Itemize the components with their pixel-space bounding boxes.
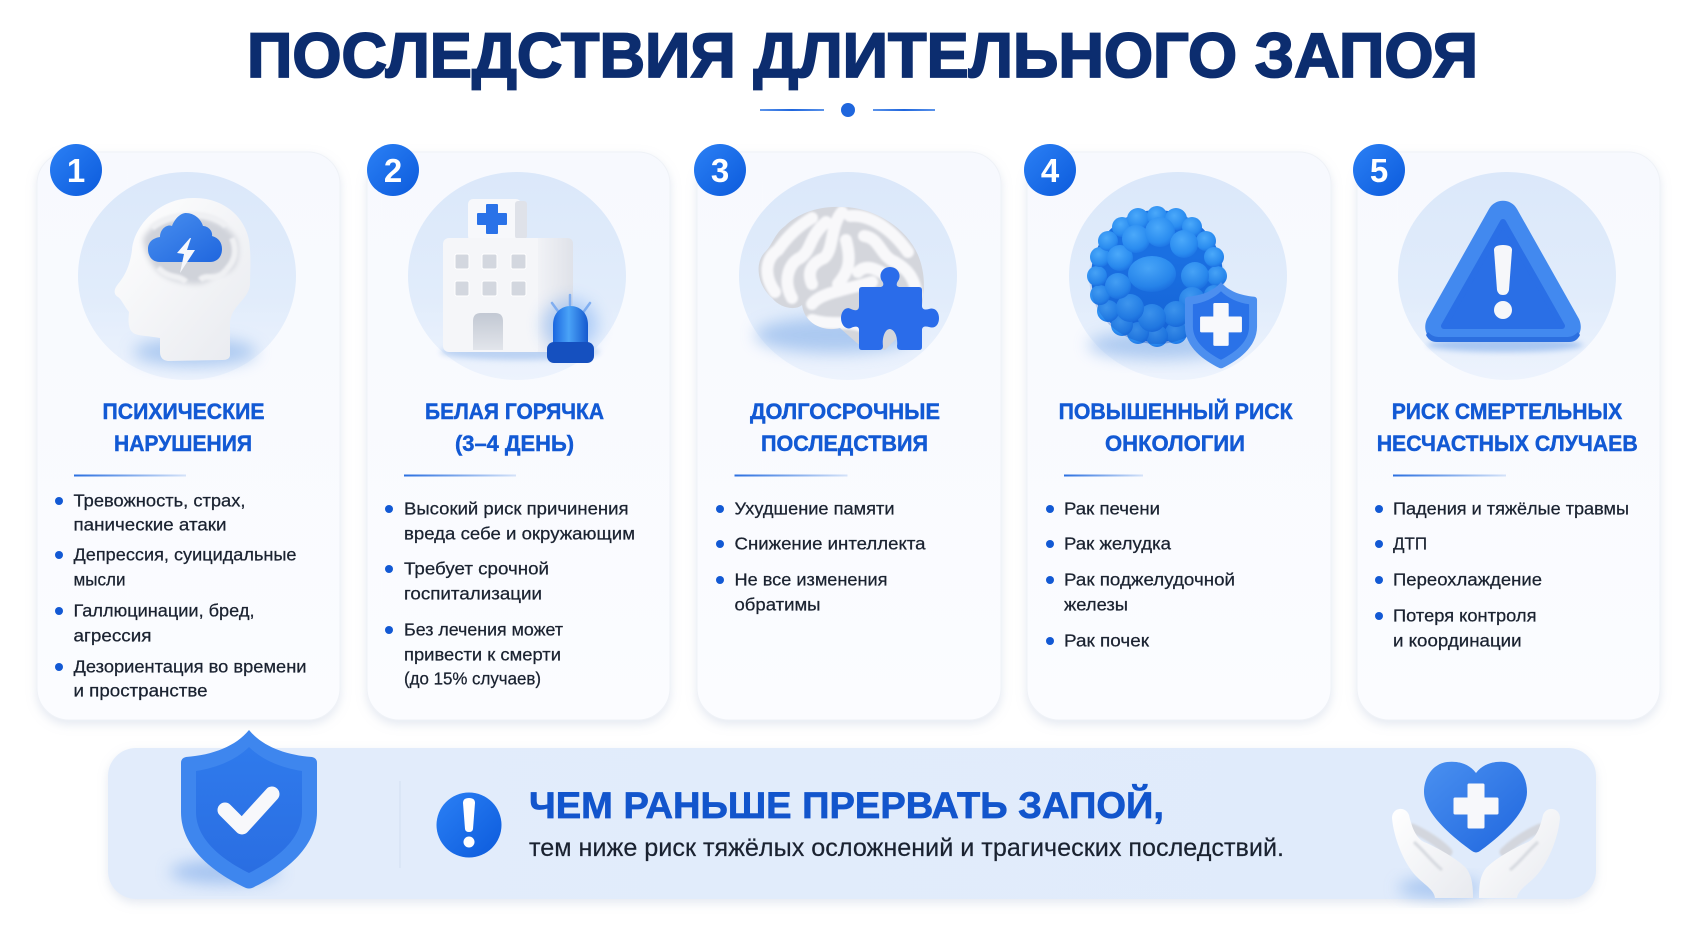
icon: shield with check xyxy=(170,730,317,888)
bullet list: вреда себе и окружающим xyxy=(404,523,635,543)
bullet list: Рак поджелудочной xyxy=(1064,569,1235,589)
panel: psychic disorders xyxy=(37,144,340,720)
heading xyxy=(102,399,264,456)
icon: head with storm cloud xyxy=(115,198,257,366)
bullet list: Снижение интеллекта xyxy=(734,533,926,553)
bullet list: Депрессия, суицидальные xyxy=(74,544,296,564)
bullet list: Ухудшение памяти xyxy=(734,498,894,518)
heading xyxy=(425,399,604,456)
banner subtext: тем ниже риск тяжёлых осложнений и трагических последствий. xyxy=(529,834,1284,862)
number badge 4: 4 xyxy=(1041,152,1060,189)
bullet list: Не все изменения xyxy=(734,569,888,589)
heading: ПОВЫШЕННЫЙ РИСК xyxy=(1059,399,1293,424)
bullet list: Высокий риск причинения xyxy=(404,498,628,518)
bullet list: госпитализации xyxy=(404,583,542,603)
number badge 1: 1 xyxy=(67,152,85,189)
number badge 2 xyxy=(367,144,419,196)
panel: delirium tremens xyxy=(367,144,670,720)
bullet list: ДТП xyxy=(1393,533,1427,553)
bullet list: Дезориентация во времени xyxy=(74,656,306,676)
bullet list: Рак почек xyxy=(1064,630,1149,650)
icon backdrop disc xyxy=(1069,172,1287,380)
heading: ПОСЛЕДСТВИЯ xyxy=(761,431,928,456)
bullet list: Потеря контроля xyxy=(1393,605,1536,625)
icon: tumor with shield xyxy=(1087,206,1257,368)
bullet list: (до 15% случаев) xyxy=(404,668,541,688)
heading xyxy=(750,399,940,456)
bullet list: Тревожность, страх, xyxy=(74,490,246,510)
small shield with plus xyxy=(1185,282,1257,368)
number badge 5 xyxy=(1353,144,1405,196)
icon backdrop disc xyxy=(78,172,296,380)
heading: НЕСЧАСТНЫХ СЛУЧАЕВ xyxy=(1377,431,1638,456)
title ornament xyxy=(760,103,935,117)
icon: hospital with siren xyxy=(440,199,600,363)
bullet list: Галлюцинации, бред, xyxy=(74,600,255,620)
icon: brain with puzzle piece xyxy=(755,207,939,353)
bullet list: мысли xyxy=(74,569,126,589)
card background xyxy=(697,152,1001,720)
number badge 3 xyxy=(694,144,746,196)
heading: (3–4 ДЕНЬ) xyxy=(455,431,574,456)
heading: РИСК СМЕРТЕЛЬНЫХ xyxy=(1392,399,1623,424)
icon backdrop disc xyxy=(739,172,957,380)
bullet list xyxy=(1375,498,1629,650)
bullet list: панические атаки xyxy=(74,514,226,534)
icon: hands holding heart xyxy=(1392,762,1560,898)
number badge 2: 2 xyxy=(384,152,402,189)
card background xyxy=(37,152,340,720)
bullet list: Рак желудка xyxy=(1064,533,1171,553)
bullet list: Требует срочной xyxy=(404,558,549,578)
banner heading: ЧЕМ РАНЬШЕ ПРЕРВАТЬ ЗАПОЙ, xyxy=(529,784,1164,826)
bullet list: Без лечения может xyxy=(404,619,563,639)
banner background xyxy=(108,748,1596,899)
card background xyxy=(367,152,670,720)
heading: ПСИХИЧЕСКИЕ xyxy=(102,399,264,424)
icon backdrop disc xyxy=(408,172,626,380)
heading: НАРУШЕНИЯ xyxy=(114,431,252,456)
number badge 1 xyxy=(50,144,102,196)
number badge 3: 3 xyxy=(711,152,729,189)
card background xyxy=(1027,152,1331,720)
number badge 4 xyxy=(1024,144,1076,196)
bullet list: обратимы xyxy=(734,594,820,614)
heading xyxy=(1059,399,1293,456)
bullet list: и координации xyxy=(1393,630,1522,650)
panel: increased oncology risk xyxy=(1024,144,1331,720)
panel: risk of fatal accidents xyxy=(1353,144,1660,720)
number badge 5: 5 xyxy=(1370,152,1388,189)
icon: warning triangle xyxy=(1425,201,1583,352)
title: ПОСЛЕДСТВИЯ ДЛИТЕЛЬНОГО ЗАПОЯ xyxy=(247,21,1478,91)
bullet list xyxy=(716,498,926,614)
bullet list: Падения и тяжёлые травмы xyxy=(1393,498,1629,518)
card background xyxy=(1357,152,1660,720)
bullet list xyxy=(1046,498,1235,650)
bullet list xyxy=(385,498,635,688)
bullet list: железы xyxy=(1064,594,1128,614)
icon backdrop disc xyxy=(1398,172,1616,380)
panel: long-term consequences xyxy=(694,144,1001,720)
bullet list: Рак печени xyxy=(1064,498,1160,518)
icon: exclamation circle xyxy=(436,792,502,858)
heading: БЕЛАЯ ГОРЯЧКА xyxy=(425,399,604,424)
bullet list: и пространстве xyxy=(74,680,208,700)
bullet list: Переохлаждение xyxy=(1393,569,1542,589)
bullet list xyxy=(55,490,306,700)
heading: ОНКОЛОГИИ xyxy=(1105,431,1245,456)
bullet list: привести к смерти xyxy=(404,644,561,664)
panel: bottom banner xyxy=(108,730,1596,899)
heading xyxy=(1377,399,1638,456)
heading: ДОЛГОСРОЧНЫЕ xyxy=(750,399,940,424)
bullet list: агрессия xyxy=(74,625,152,645)
